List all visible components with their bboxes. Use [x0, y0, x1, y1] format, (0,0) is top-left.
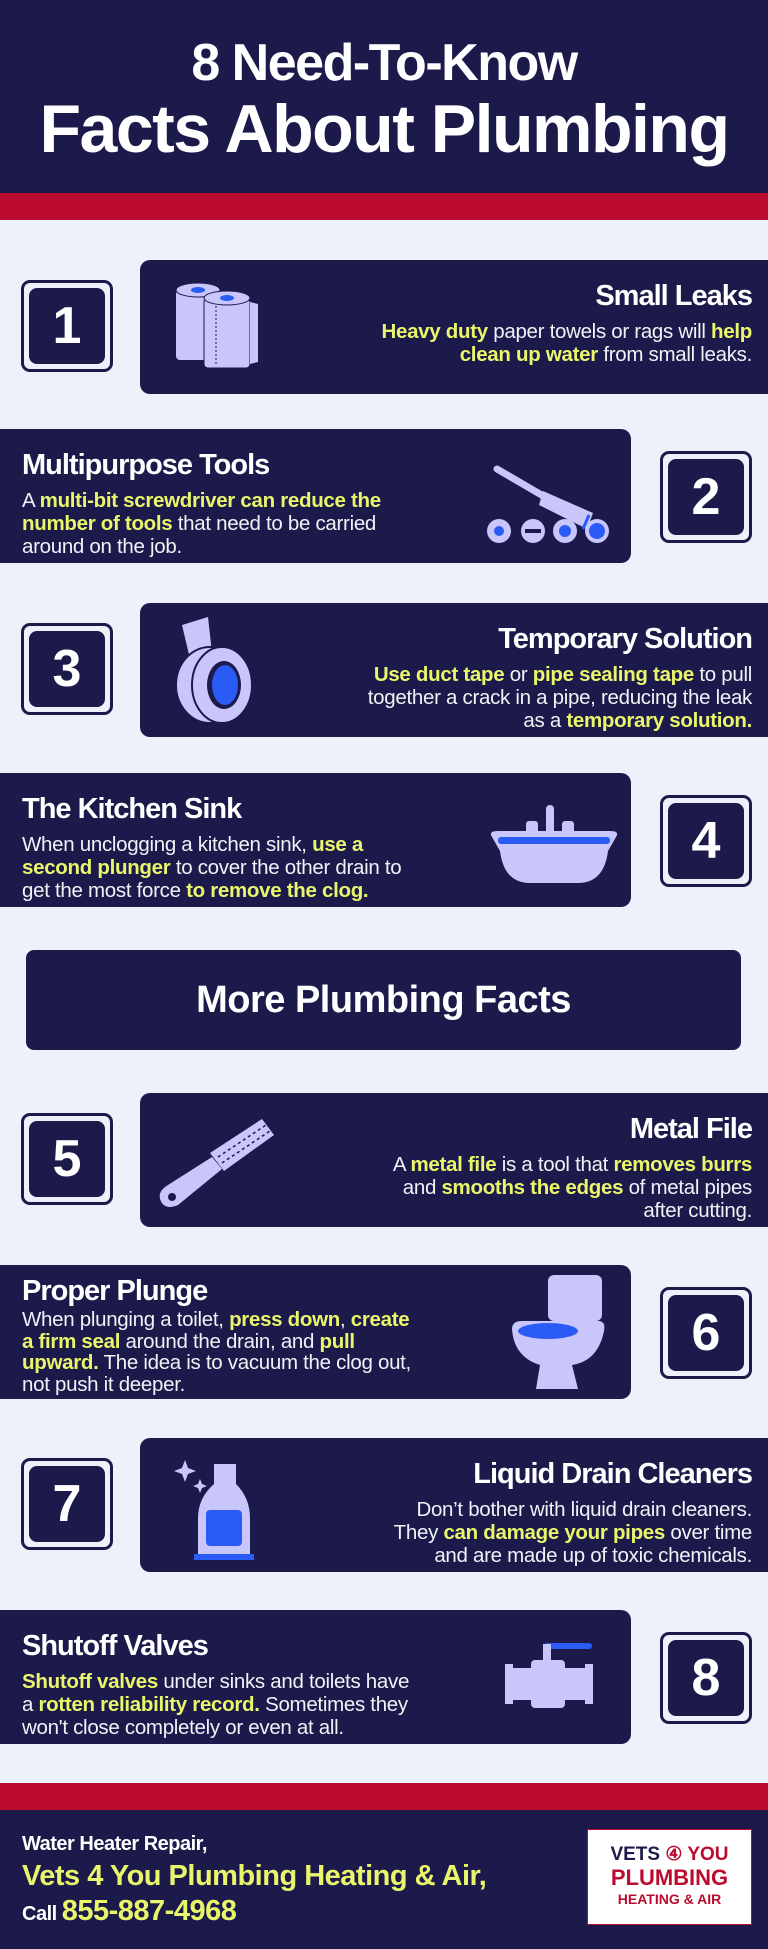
icon: toilet	[512, 1275, 604, 1389]
text: Use duct tape or pipe sealing tape to pull	[374, 663, 752, 686]
red band top	[0, 193, 768, 220]
text: as a temporary solution.	[523, 709, 752, 732]
text	[22, 833, 401, 902]
number 2	[660, 451, 752, 543]
number 5	[21, 1113, 113, 1205]
text: number of tools that need to be carried	[22, 512, 376, 535]
heading: The Kitchen Sink	[22, 793, 241, 825]
number 3: 3	[53, 640, 81, 698]
text: Heavy duty paper towels or rags will help	[381, 320, 752, 343]
number 6	[660, 1287, 752, 1379]
icon: metal file	[160, 1119, 274, 1207]
heading: Multipurpose Tools	[22, 449, 269, 481]
number 2: 2	[692, 468, 720, 526]
number 3	[21, 623, 113, 715]
panel: small leaks	[140, 260, 768, 394]
text: after cutting.	[643, 1199, 752, 1222]
footer text: Water Heater Repair,	[22, 1833, 207, 1855]
icon: cleaner bottle	[174, 1460, 254, 1560]
number 7: 7	[53, 1475, 81, 1533]
title: 8 Need-To-Know	[191, 34, 577, 92]
footer text	[22, 1833, 486, 1927]
footer text: Vets 4 You Plumbing Heating & Air,	[22, 1860, 486, 1892]
number 8	[660, 1632, 752, 1724]
red band bottom	[0, 1783, 768, 1810]
text	[381, 320, 752, 366]
icon: valve	[505, 1643, 593, 1708]
text: A multi-bit screwdriver can reduce the	[22, 489, 381, 512]
logo: HEATING & AIR	[618, 1891, 721, 1907]
text	[368, 663, 752, 732]
icon: screwdriver	[487, 466, 609, 543]
text: and smooths the edges of metal pipes	[403, 1176, 752, 1199]
logo	[587, 1829, 752, 1925]
section heading: more plumbing facts	[26, 950, 741, 1050]
text: Shutoff valves under sinks and toilets have	[22, 1670, 409, 1693]
logo: PLUMBING	[611, 1865, 728, 1890]
panel: metal file	[140, 1093, 768, 1227]
icon: paper towels	[176, 284, 258, 368]
number 8: 8	[692, 1649, 720, 1707]
text: When plunging a toilet, press down, create	[22, 1308, 409, 1331]
heading: Small Leaks	[595, 280, 752, 312]
text: Don’t bother with liquid drain cleaners.	[416, 1498, 752, 1521]
heading: Temporary Solution	[498, 623, 752, 655]
footer text: Call 855-887-4968	[22, 1895, 236, 1927]
text	[394, 1498, 752, 1567]
heading: Liquid Drain Cleaners	[473, 1458, 752, 1490]
footer	[0, 1810, 768, 1949]
text	[22, 1670, 409, 1739]
text: won't close completely or even at all.	[22, 1716, 344, 1739]
number 1: 1	[53, 297, 81, 355]
panel: shutoff valves	[0, 1610, 631, 1744]
heading: Metal File	[630, 1113, 752, 1145]
panel: liquid drain cleaners	[140, 1438, 768, 1572]
text: upward. The idea is to vacuum the clog out,	[22, 1351, 411, 1374]
text: A metal file is a tool that removes burrs	[393, 1153, 752, 1176]
section heading: more plumbing facts: More Plumbing Facts	[196, 979, 571, 1021]
panel: kitchen sink	[0, 773, 631, 907]
text: They can damage your pipes over time	[394, 1521, 752, 1544]
header	[0, 0, 768, 193]
number 6: 6	[692, 1304, 720, 1362]
text: When unclogging a kitchen sink, use a	[22, 833, 363, 856]
text: not push it deeper.	[22, 1372, 185, 1396]
panel: temporary solution	[140, 603, 768, 737]
text: around on the job.	[22, 535, 182, 558]
text: together a crack in a pipe, reducing the leak	[368, 686, 752, 709]
number 4	[660, 795, 752, 887]
text	[22, 1308, 411, 1396]
panel: multipurpose tools	[0, 429, 631, 563]
text: clean up water from small leaks.	[460, 343, 752, 366]
text	[22, 489, 381, 558]
title: Facts About Plumbing	[39, 91, 728, 167]
text: a rotten reliability record. Sometimes they	[22, 1693, 408, 1716]
panel: proper plunge	[0, 1265, 631, 1399]
text: get the most force to remove the clog.	[22, 879, 368, 902]
text	[392, 1153, 752, 1222]
number 1	[21, 280, 113, 372]
text: second plunger to cover the other drain to	[22, 856, 401, 879]
text: a firm seal around the drain, and pull	[22, 1330, 355, 1352]
logo: VETS ④ YOU	[610, 1844, 729, 1865]
icon: tape	[177, 617, 251, 722]
heading: Proper Plunge	[22, 1275, 207, 1307]
heading: Shutoff Valves	[22, 1630, 208, 1662]
number 4: 4	[692, 812, 720, 870]
icon: sink	[490, 805, 618, 883]
title	[39, 34, 728, 167]
number 5: 5	[53, 1130, 81, 1188]
text: and are made up of toxic chemicals.	[434, 1544, 752, 1567]
number 7	[21, 1458, 113, 1550]
